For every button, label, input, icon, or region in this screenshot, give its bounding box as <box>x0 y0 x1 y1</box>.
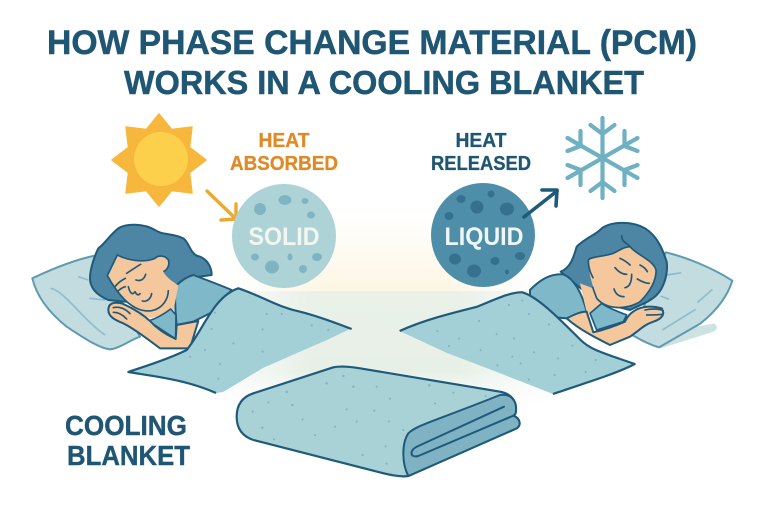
label: cooling blanket <box>65 410 190 471</box>
sleeve <box>148 309 176 339</box>
left sleeper <box>32 225 352 393</box>
shirt <box>530 274 587 318</box>
folded cooling blanket <box>237 367 520 476</box>
facial features <box>614 258 663 315</box>
icon: snowflake <box>568 118 638 198</box>
solid PCM sphere: SOLID <box>248 223 320 251</box>
label: cooling blanket: COOLING <box>65 410 187 441</box>
title <box>47 24 697 101</box>
head and arm <box>90 225 232 348</box>
label: heat released <box>431 129 531 175</box>
blanket speckles <box>436 300 597 380</box>
neck and face <box>107 255 178 318</box>
solid PCM sphere <box>232 184 336 288</box>
neck <box>580 283 602 313</box>
liquid PCM sphere <box>431 183 535 287</box>
label: heat released: HEAT <box>456 129 507 152</box>
blanket <box>400 292 635 394</box>
liquid PCM sphere: LIQUID <box>444 223 524 251</box>
title: HOW PHASE CHANGE MATERIAL (PCM) <box>47 24 697 62</box>
label: heat absorbed <box>230 129 338 175</box>
pillow crease <box>51 277 105 335</box>
blanket <box>128 288 350 393</box>
pillow shadow <box>637 323 717 348</box>
icon: sun <box>112 114 206 206</box>
arrow: heat into solid <box>207 191 236 220</box>
floor <box>200 291 570 406</box>
blanket speckles <box>189 312 329 380</box>
face <box>588 247 656 308</box>
speckles <box>252 375 487 465</box>
face outline <box>107 255 169 311</box>
shirt <box>175 275 232 325</box>
fold end <box>403 395 520 476</box>
arm and hand <box>108 303 198 348</box>
label: cooling blanket: BLANKET <box>67 440 190 471</box>
title: WORKS IN A COOLING BLANKET <box>124 64 644 101</box>
label: heat absorbed: HEAT <box>258 129 310 152</box>
blanket outline <box>400 292 635 394</box>
background glow <box>230 215 540 291</box>
arm and hand <box>567 307 663 345</box>
right sleeper <box>400 223 732 394</box>
face outline <box>588 235 656 308</box>
sleeve <box>590 303 627 330</box>
facial features <box>113 264 152 319</box>
pillow <box>632 252 732 347</box>
hair <box>90 225 212 302</box>
blanket outline <box>128 288 352 393</box>
hair <box>561 223 667 310</box>
pillow <box>32 256 140 349</box>
head and arm <box>530 223 667 345</box>
label: heat released: RELEASED <box>431 152 531 175</box>
label: heat absorbed: ABSORBED <box>230 152 338 175</box>
arrow: heat released from liquid <box>524 190 557 217</box>
pillow creases <box>661 273 712 330</box>
fold lines <box>411 407 513 456</box>
blanket body <box>237 367 520 476</box>
